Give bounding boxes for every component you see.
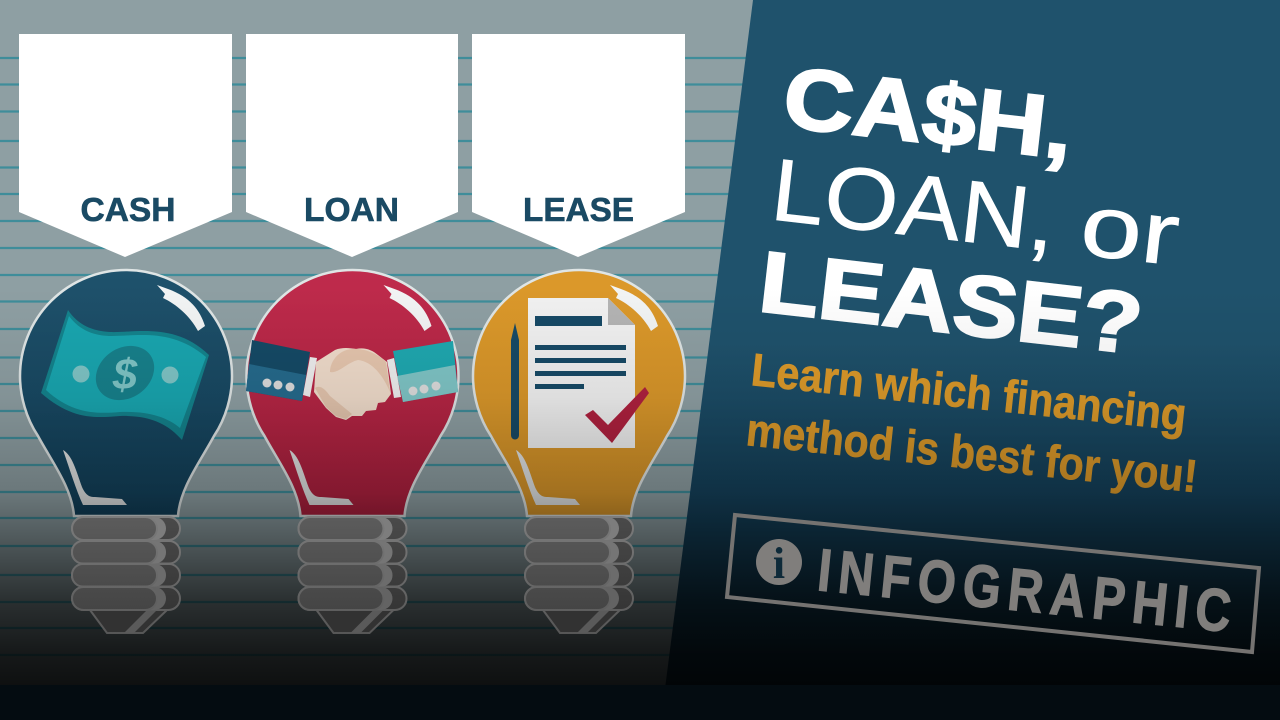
subtitle: method is best for you! (744, 403, 1200, 502)
bulb base: lease (525, 517, 633, 633)
icon: info circle (756, 539, 802, 588)
title: CA$H, (779, 49, 1078, 178)
bulb base: loan (298, 517, 406, 633)
label: lease: LEASE (523, 191, 634, 228)
subtitle (744, 343, 1200, 502)
icon: banknote: $ (112, 350, 138, 399)
bulb base: cash (72, 517, 180, 633)
bottom dark strip (0, 685, 1280, 720)
title: LEASE? (755, 234, 1147, 373)
icon: info circle: i (773, 539, 785, 588)
ruled background lines (0, 58, 760, 655)
pennant: lease (472, 34, 685, 257)
bulb glass: cash (20, 270, 232, 516)
icon: banknote (41, 310, 209, 440)
bulb glass: loan (246, 270, 458, 516)
left background (0, 0, 760, 720)
title: or (1076, 175, 1184, 284)
label: cash: CASH (80, 191, 176, 228)
icon: pencil (511, 323, 519, 440)
label: loan: LOAN (304, 191, 399, 228)
bulb glass: lease (473, 270, 685, 516)
icon: handshake (246, 340, 458, 420)
pennant: cash (19, 34, 232, 257)
subtitle: Learn which financing (749, 343, 1189, 441)
icon: check mark (585, 387, 649, 443)
stamp label: INFOGRAPHIC (815, 536, 1234, 645)
right title panel (661, 0, 1280, 720)
icon: contract document (511, 298, 649, 448)
pennant: loan (246, 34, 458, 257)
title (755, 49, 1184, 373)
infographic stamp (727, 515, 1259, 652)
title: LOAN, (767, 140, 1061, 270)
